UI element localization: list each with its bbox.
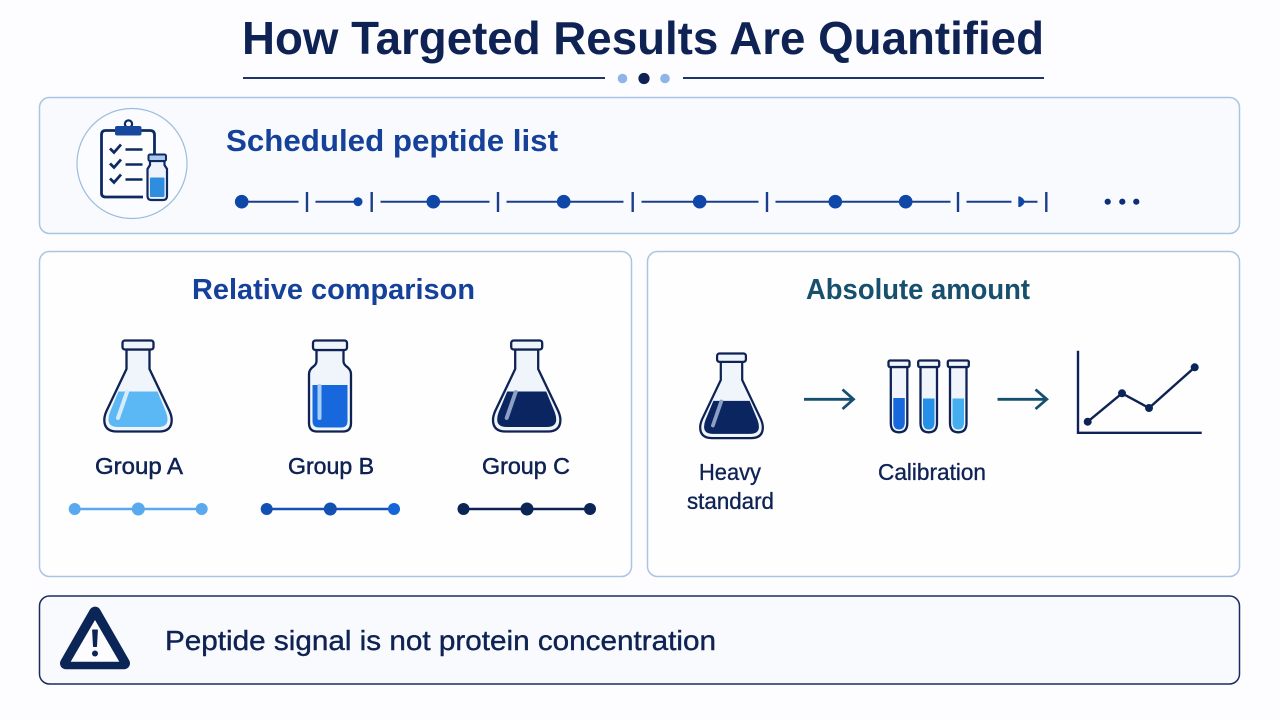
icon: clipboard and vial — [77, 108, 187, 218]
panel: scheduled peptide list — [40, 98, 1240, 234]
icon: calibration tubes — [888, 360, 969, 432]
heading: scheduled peptide list: Scheduled peptide list — [226, 123, 558, 158]
label: group B: Group B — [288, 453, 374, 479]
label: calibration: Calibration — [878, 459, 986, 485]
icon: vial group B — [309, 340, 351, 432]
label: group A: Group A — [95, 453, 183, 479]
heading: absolute amount: Absolute amount — [806, 274, 1030, 306]
heading: relative comparison: Relative comparison — [192, 274, 475, 306]
label: heavy standard: standard — [687, 488, 774, 514]
arrow: standard to calibration — [804, 390, 854, 409]
icon: flask group A — [104, 340, 172, 432]
arrow: calibration to curve — [998, 390, 1047, 409]
panel: absolute amount — [648, 252, 1240, 576]
title: How Targeted Results Are Quantified — [242, 12, 1044, 64]
series dots: group B — [261, 502, 400, 516]
series dots: group C — [458, 502, 596, 516]
warning text: Peptide signal is not protein concentration — [165, 625, 716, 656]
peptide schedule timeline — [235, 192, 1139, 212]
panel: warning callout — [40, 596, 1240, 684]
icon: flask group C — [493, 340, 560, 432]
chart: calibration curve — [1078, 351, 1202, 433]
icon: warning triangle — [66, 613, 124, 663]
panel: relative comparison — [40, 252, 632, 576]
label: group C: Group C — [482, 453, 570, 479]
series dots: group A — [69, 502, 208, 516]
icon: heavy standard flask — [700, 353, 763, 438]
label: heavy standard: Heavy — [699, 459, 761, 485]
label: heavy standard — [687, 459, 774, 514]
